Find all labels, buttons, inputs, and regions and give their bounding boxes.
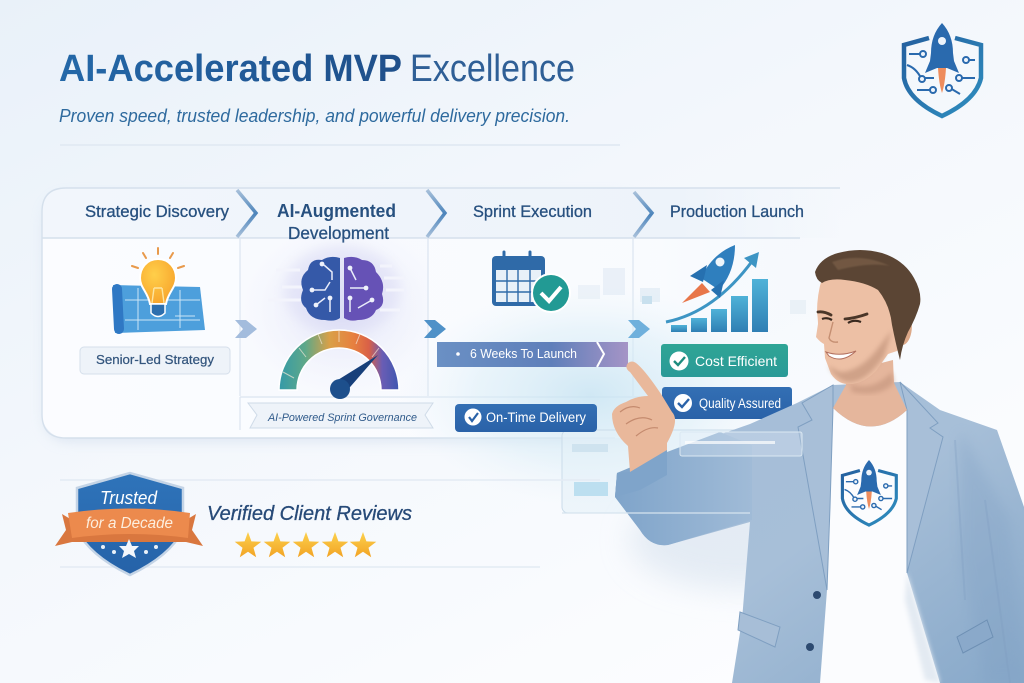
title: AI-Accelerated MVP	[59, 48, 402, 90]
person pointing at the flow	[562, 250, 1024, 683]
icon: trusted shield badge: Trusted	[100, 488, 158, 508]
trust section: badge and reviews	[55, 473, 600, 575]
eyes and brows	[818, 312, 867, 319]
label: Senior-Led Strategy: Senior-Led Strategy	[96, 352, 215, 367]
label: 6 Weeks To Launch	[437, 342, 628, 367]
lapels	[798, 382, 943, 590]
title	[59, 48, 575, 90]
heading: Strategic Discovery: Strategic Discovery	[85, 202, 229, 221]
mouth	[826, 351, 856, 359]
badge: Quality Assured	[662, 387, 792, 419]
heading: Sprint Execution: Sprint Execution	[473, 202, 592, 221]
pockets	[738, 612, 780, 647]
icon: trusted shield badge: for a Decade	[86, 515, 173, 532]
icon: lightbulb over blueprint	[113, 248, 205, 333]
label: Senior-Led Strategy	[80, 347, 230, 374]
hand	[612, 362, 675, 472]
badge: On-Time Delivery	[455, 404, 597, 432]
arrows: header chevrons	[237, 190, 652, 237]
hair	[815, 250, 920, 360]
icon: five stars	[235, 532, 376, 557]
icon: circuit brain	[268, 246, 404, 334]
ear	[896, 316, 914, 346]
icon: calendar with check	[492, 252, 571, 313]
nose	[829, 322, 838, 342]
label: AI-Powered Sprint Governance: AI-Powered Sprint Governance	[267, 412, 417, 424]
icon: trusted shield badge	[55, 473, 203, 575]
badge: Cost Efficient: Cost Efficient	[695, 353, 777, 369]
arrows: mid flow chevrons	[235, 320, 650, 338]
subtitle: Proven speed, trusted leadership, and powerful delivery precision.	[59, 105, 570, 126]
badge: On-Time Delivery: On-Time Delivery	[486, 410, 586, 425]
heading: Production Launch: Production Launch	[670, 202, 804, 221]
icon: shield rocket logo	[904, 23, 981, 116]
buttons	[813, 591, 821, 599]
jacket	[615, 382, 1024, 683]
chart: speed gauge	[279, 330, 399, 399]
hologram glow behind the hand	[400, 268, 806, 513]
panel: process flow	[42, 188, 840, 442]
title: Excellence	[410, 48, 575, 90]
cuff	[615, 450, 667, 497]
label: 6 Weeks To Launch: 6 Weeks To Launch	[470, 346, 577, 361]
t-shirt	[820, 408, 940, 683]
text: Verified Client Reviews: Verified Client Reviews	[207, 503, 412, 525]
chart: rocket and rising bars	[666, 245, 768, 332]
hologram overlay on sleeve	[680, 432, 802, 456]
heading: AI-Augmented Development	[277, 201, 396, 243]
face	[816, 268, 907, 384]
shirt logo	[842, 460, 896, 525]
badge: Quality Assured: Quality Assured	[699, 396, 781, 411]
label: AI-Powered Sprint Governance	[248, 403, 433, 428]
neck	[833, 360, 907, 427]
heading: AI-Augmented Development: Development	[288, 223, 389, 243]
heading: AI-Augmented Development: AI-Augmented	[277, 201, 396, 221]
badge: Cost Efficient	[661, 344, 788, 377]
